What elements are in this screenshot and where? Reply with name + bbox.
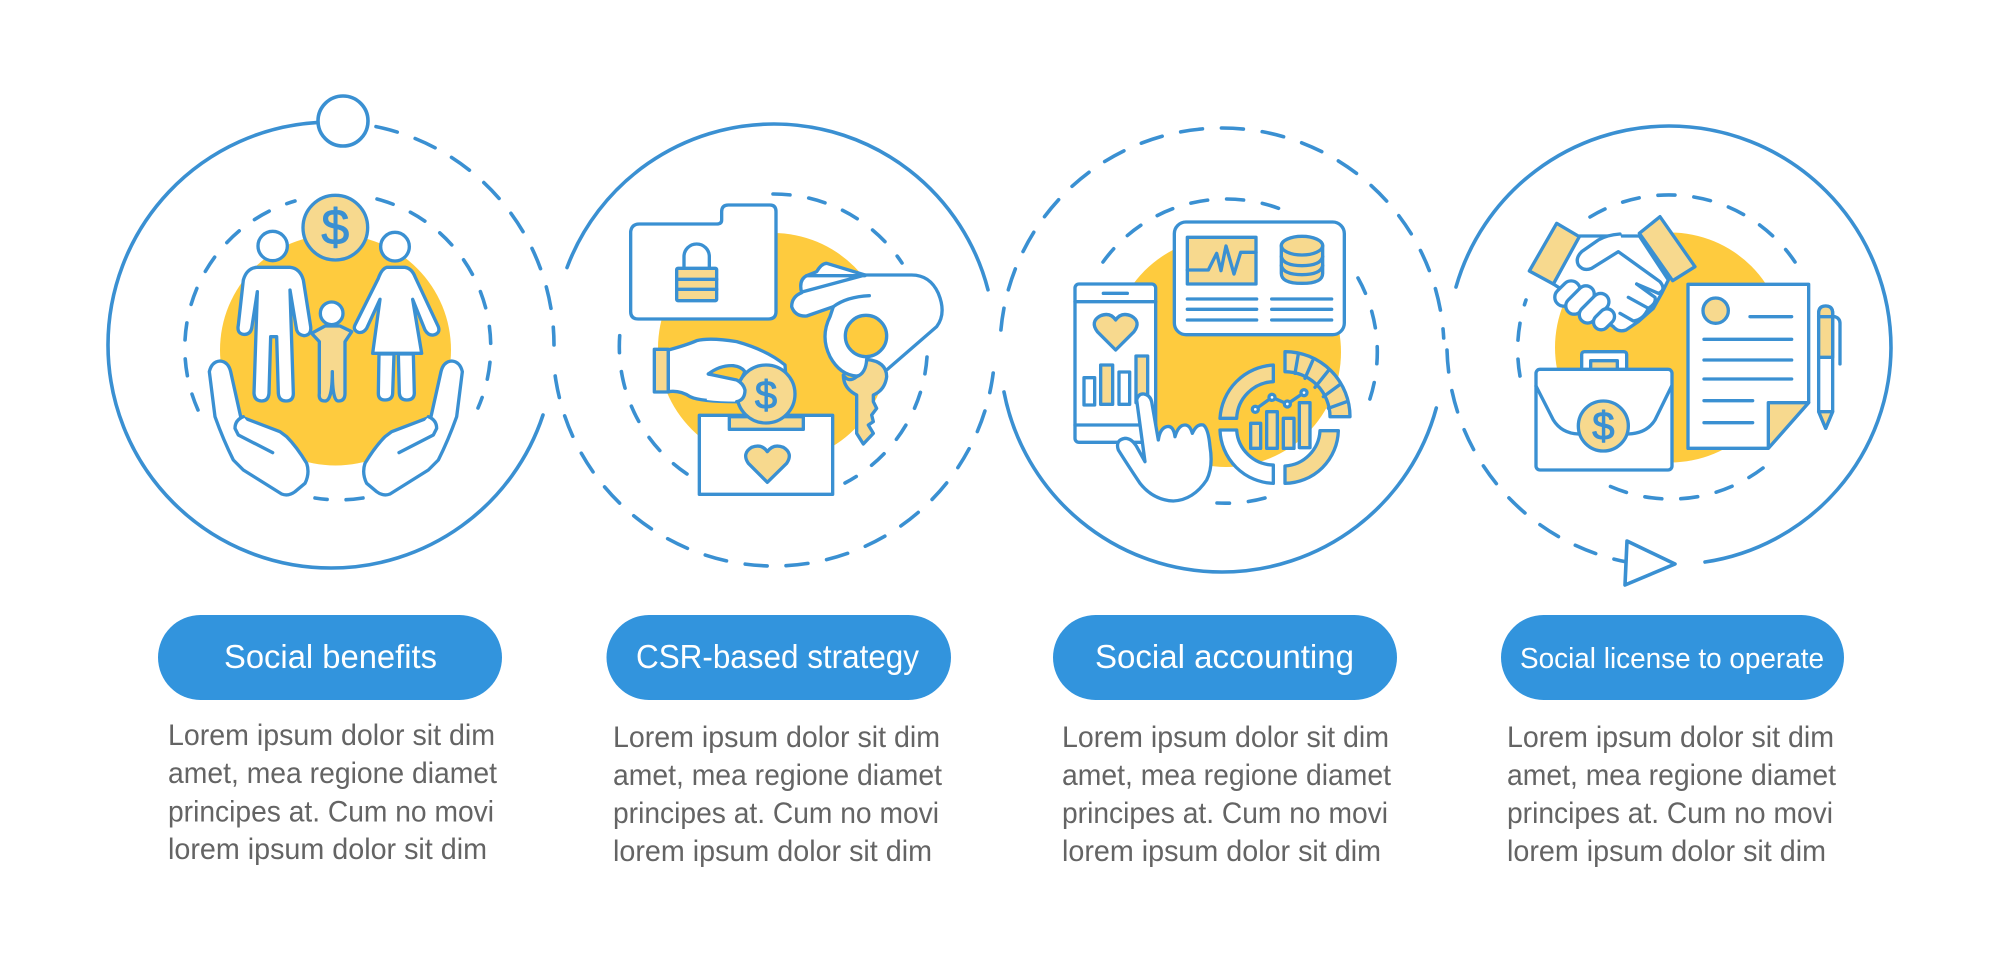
yellow disc bbox=[1555, 232, 1785, 462]
text block: social accounting: amet, mea regione diamet bbox=[1062, 759, 1392, 792]
pointing hand bbox=[1117, 394, 1211, 501]
pill: CSR-based strategy: CSR-based strategy bbox=[636, 638, 919, 675]
text block: social license to operate: principes at. Cum no movi bbox=[1507, 797, 1833, 830]
hand dropping coin bbox=[654, 339, 795, 423]
text block: CSR-based strategy bbox=[613, 721, 943, 868]
inner dashed ring bbox=[185, 199, 491, 500]
pill: CSR-based strategy bbox=[606, 615, 951, 700]
yellow disc bbox=[220, 234, 451, 466]
panel: social benefits bbox=[108, 96, 554, 568]
outer ring bbox=[1447, 126, 1891, 562]
icon: locked folder, key and donation bbox=[631, 205, 942, 494]
outer ring bbox=[1001, 128, 1444, 572]
dashboard card bbox=[1174, 222, 1344, 335]
text block: social benefits: Lorem ipsum dolor sit dim bbox=[168, 719, 495, 752]
hand holding key bbox=[792, 263, 942, 444]
text block: social license to operate: amet, mea regione diamet bbox=[1507, 759, 1837, 792]
inner dashed ring bbox=[1103, 199, 1377, 503]
donation box with heart bbox=[699, 415, 833, 494]
text block: social accounting bbox=[1062, 721, 1392, 868]
yellow disc bbox=[658, 233, 888, 463]
inner dashed ring bbox=[1518, 195, 1795, 499]
outer ring bbox=[108, 122, 554, 568]
text block: CSR-based strategy: amet, mea regione diamet bbox=[613, 759, 943, 792]
arrow head bbox=[1625, 541, 1675, 585]
text block: social benefits: principes at. Cum no movi bbox=[168, 796, 494, 828]
man bbox=[238, 231, 311, 401]
text block: social accounting: Lorem ipsum dolor sit dim bbox=[1062, 721, 1389, 754]
start node bbox=[318, 96, 368, 146]
panel: CSR-based strategy bbox=[555, 124, 993, 566]
left hand bbox=[209, 361, 308, 495]
outer ring bbox=[555, 124, 993, 566]
donut chart with bars bbox=[1220, 352, 1350, 483]
inner dashed ring bbox=[619, 194, 927, 483]
smartphone bbox=[1075, 284, 1156, 442]
pen bbox=[1819, 306, 1840, 428]
icon: briefcase, contract and pen bbox=[1536, 284, 1840, 470]
text block: social accounting: lorem ipsum dolor sit dim bbox=[1062, 835, 1381, 868]
icon: family in hands with dollar coin bbox=[209, 195, 462, 495]
text block: CSR-based strategy: Lorem ipsum dolor sit dim bbox=[613, 721, 940, 754]
icon: handshake bbox=[1529, 217, 1695, 333]
pill: social license to operate: Social license to operate bbox=[1520, 643, 1824, 675]
yellow disc bbox=[1111, 237, 1341, 467]
text block: social benefits: amet, mea regione diamet bbox=[168, 757, 498, 790]
locked folder bbox=[631, 205, 776, 319]
pill: social accounting bbox=[1053, 615, 1397, 700]
text block: social accounting: principes at. Cum no movi bbox=[1062, 797, 1388, 830]
briefcase with coin bbox=[1536, 352, 1672, 470]
child bbox=[312, 302, 352, 401]
pill: social benefits: Social benefits bbox=[224, 638, 437, 675]
text block: social license to operate bbox=[1507, 721, 1837, 868]
pill: social license to operate bbox=[1501, 615, 1844, 700]
panel: social accounting bbox=[1001, 128, 1444, 572]
text block: social benefits bbox=[168, 719, 498, 866]
text block: CSR-based strategy: lorem ipsum dolor sit dim bbox=[613, 835, 932, 868]
icon: dashboard, phone and charts bbox=[1075, 222, 1350, 501]
text block: social license to operate: Lorem ipsum dolor sit dim bbox=[1507, 721, 1834, 754]
woman bbox=[354, 232, 439, 400]
dollar coin bbox=[303, 195, 368, 260]
right hand bbox=[364, 361, 462, 495]
hand dropping coin: $ bbox=[755, 373, 777, 417]
text block: social license to operate: lorem ipsum dolor sit dim bbox=[1507, 835, 1826, 868]
text block: CSR-based strategy: principes at. Cum no movi bbox=[613, 797, 939, 830]
dollar coin: $ bbox=[321, 199, 349, 255]
briefcase with coin: $ bbox=[1592, 404, 1614, 448]
pill: social benefits bbox=[158, 615, 502, 700]
panel: social license to operate bbox=[1447, 126, 1891, 585]
contract document bbox=[1688, 284, 1809, 448]
text block: social benefits: lorem ipsum dolor sit dim bbox=[168, 833, 487, 866]
pill: social accounting: Social accounting bbox=[1095, 638, 1354, 675]
